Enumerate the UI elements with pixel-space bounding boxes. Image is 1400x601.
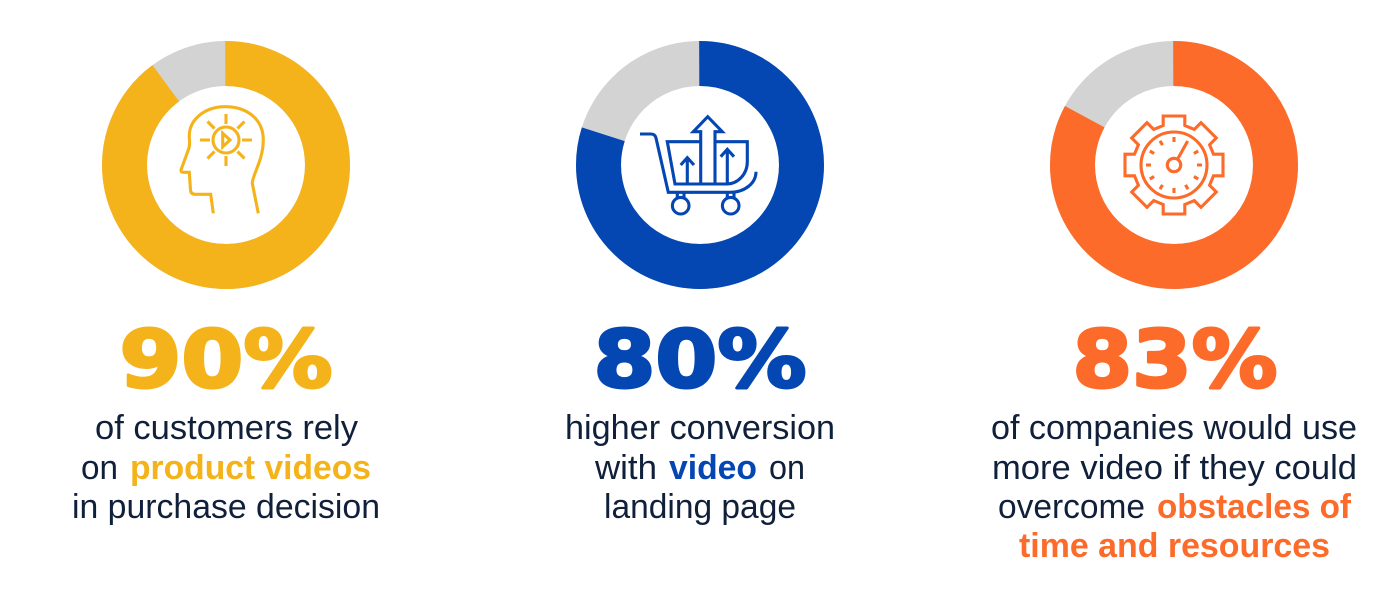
big number: 80%: 80%	[594, 314, 806, 406]
panel: 80% higher conversion	[565, 64, 835, 526]
panel: 90% product videos	[72, 64, 380, 526]
donut chart: 90% yellow	[124, 64, 328, 266]
icon: shopping cart with rising arrows	[640, 117, 756, 214]
text block: 83% description: obstacles of	[1157, 488, 1352, 526]
text block: 83% description: overcome	[998, 488, 1145, 526]
text block: 80% description: higher conversion	[565, 409, 835, 447]
text block: 90% description: of customers rely	[95, 409, 358, 447]
text block: 83% description: time and resources	[1019, 527, 1330, 565]
text block: 90% description: in purchase decision	[72, 488, 380, 526]
panel: 83% companies	[991, 64, 1357, 565]
text block: 83% description	[991, 409, 1357, 565]
text block: 80% description: on	[769, 449, 805, 487]
text block: 83% description: of companies would use	[991, 409, 1357, 447]
icon: head with play-button light bulb	[181, 107, 263, 213]
text block: 90% description	[72, 409, 380, 526]
icon: gear with speedometer dial	[1125, 116, 1223, 214]
text block: 90% description: product videos	[130, 449, 371, 487]
text block: 80% description: with	[594, 449, 657, 487]
text block: 80% description	[565, 409, 835, 526]
text block: 80% description: video	[669, 449, 757, 487]
donut chart: 83% orange	[1072, 64, 1276, 266]
text block: 80% description: landing page	[604, 488, 796, 526]
text block: 83% description: more video if they could	[992, 449, 1357, 487]
text block: 90% description: on	[81, 449, 118, 487]
donut chart: 80% blue	[598, 64, 802, 266]
big number: 83%: 83%	[1072, 314, 1278, 406]
big number: 90%: 90%	[120, 314, 332, 406]
